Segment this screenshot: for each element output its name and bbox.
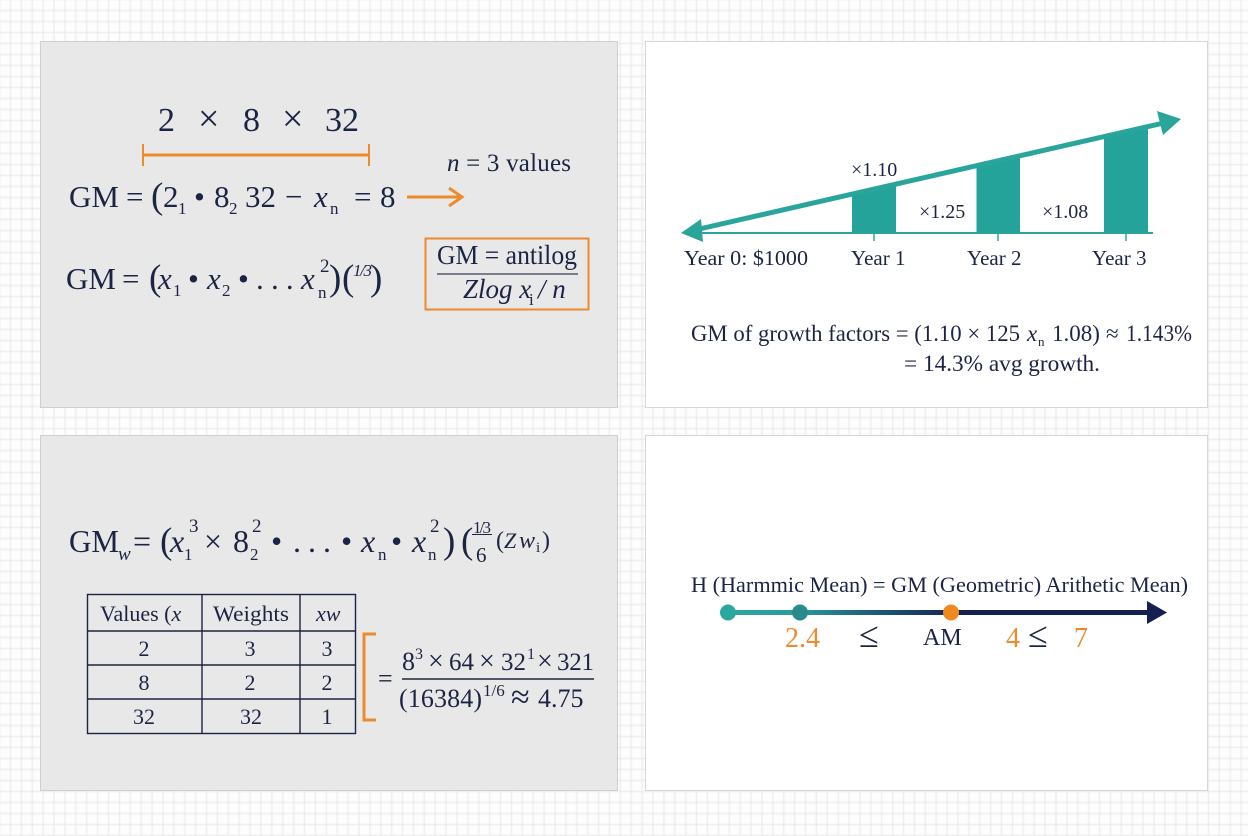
weighted calculation result: 1/6	[483, 681, 505, 700]
table rows: 3	[244, 636, 256, 661]
formula: weighted GM: (	[160, 521, 172, 562]
formula: weighted GM: 2	[252, 516, 262, 537]
growth multipliers	[851, 159, 1088, 223]
year axis labels: Year 3	[1092, 246, 1146, 270]
weighted calculation result: ≈	[511, 679, 530, 716]
formula: weighted GM: •	[271, 523, 282, 559]
panel: growth rates	[646, 42, 1208, 408]
formula: weighted GM: GM	[69, 523, 119, 559]
formula: weighted GM: ×	[204, 523, 222, 559]
table header: xw	[315, 601, 341, 626]
growth multipliers: ×1.25	[919, 201, 965, 223]
table rows	[133, 636, 332, 729]
table rows: 2	[138, 636, 150, 661]
table rows: 2	[244, 670, 256, 695]
table rows: 32	[240, 704, 262, 729]
formula: weighted GM: )	[542, 528, 550, 554]
number line labels: 4	[1006, 623, 1020, 654]
formula: general GM: )	[329, 258, 341, 299]
formula: weighted GM: 3	[189, 516, 198, 537]
formula: general GM	[66, 256, 382, 302]
panel: weighted geometric mean	[40, 436, 618, 790]
formula: worked GM: =	[126, 179, 143, 214]
number line labels: ≤	[1028, 615, 1048, 655]
formula: worked GM: n	[330, 199, 339, 218]
table: values and weights	[87, 594, 356, 734]
formula: general GM: •	[188, 261, 199, 296]
formula: worked GM: 8	[380, 179, 396, 214]
formula: general GM: x	[206, 261, 221, 296]
table header: Weights	[213, 601, 289, 626]
marker: arithmetic mean	[943, 604, 959, 620]
formula: weighted GM: x	[169, 523, 184, 559]
callout: antilog formula box: GM = antilog	[437, 240, 577, 270]
growth result text: n	[1038, 334, 1045, 349]
growth result text: 1.143%	[1126, 321, 1192, 346]
weighted calculation result: 4.75	[538, 684, 584, 713]
product of values: ×	[282, 98, 303, 140]
formula: worked GM: x	[313, 179, 328, 214]
callout: antilog formula box: Zlog x	[463, 274, 531, 304]
formula: general GM: •	[238, 261, 249, 296]
formula: weighted GM: w	[118, 544, 131, 565]
formula: general GM: (	[149, 258, 161, 299]
formula: weighted GM	[69, 516, 550, 567]
chart: growth bars with trend arrow	[681, 111, 1181, 242]
orange bracket	[364, 634, 376, 720]
marker: harmonic mean	[720, 604, 736, 620]
number line labels: 2.4	[785, 623, 820, 654]
formula: weighted GM: (	[496, 528, 504, 554]
growth multipliers: ×1.10	[851, 159, 897, 181]
formula: weighted GM: x	[360, 523, 375, 559]
growth result text: = 14.3% avg growth.	[904, 351, 1100, 376]
formula: weighted GM: •	[341, 523, 352, 559]
product of values: ×	[198, 98, 219, 140]
marker: geometric mean	[792, 604, 808, 620]
formula: weighted GM: n	[428, 545, 437, 564]
formula: weighted GM: =	[133, 523, 151, 559]
formula: general GM: )	[370, 258, 382, 299]
formula: worked GM: −	[285, 179, 302, 214]
growth multipliers: ×1.08	[1042, 201, 1088, 223]
formula: worked GM: 2	[163, 179, 178, 214]
formula: general GM: n	[318, 283, 327, 302]
weighted calculation result: ×	[428, 646, 444, 677]
formula: weighted GM: 6	[476, 543, 486, 567]
table header: Values (x	[100, 601, 181, 626]
inequality heading: H (Harmmic Mean) = GM (Geometric) Arithetic Mean)	[691, 572, 1188, 597]
formula: weighted GM: x	[411, 523, 426, 559]
formula: worked GM: 2	[229, 199, 238, 218]
number line labels: AM	[923, 625, 962, 651]
product of values	[158, 98, 359, 140]
formula: weighted GM: •	[391, 523, 402, 559]
orange arrow to result	[407, 188, 462, 206]
formula: general GM: 1/3	[353, 261, 372, 280]
number line labels: 7	[1074, 623, 1088, 654]
formula: worked GM: GM	[69, 179, 119, 214]
product of values: 32	[325, 102, 359, 139]
table header	[100, 601, 341, 626]
year axis labels	[684, 246, 1146, 270]
formula: worked GM	[69, 176, 396, 218]
weighted calculation result: 64	[449, 649, 474, 676]
formula: worked GM: 1	[178, 199, 186, 218]
formula: general GM: 2	[222, 281, 230, 300]
formula: worked GM: =	[354, 179, 371, 214]
table rows: 1	[322, 704, 332, 729]
year axis labels: Year 1	[851, 246, 905, 270]
panel: mean inequality	[646, 436, 1208, 790]
formula: worked GM: 8	[214, 179, 230, 214]
formula: worked GM: •	[194, 179, 205, 214]
weighted calculation result	[378, 646, 594, 716]
weighted calculation result: 1	[527, 646, 535, 663]
formula: general GM: =	[122, 261, 139, 296]
formula: worked GM: 32	[245, 179, 276, 214]
table rows: 2	[322, 670, 332, 695]
weighted calculation result: 32	[501, 649, 526, 676]
number line labels	[785, 615, 1088, 655]
product of values: 8	[243, 102, 260, 139]
number line labels: ≤	[859, 615, 879, 655]
weighted calculation result: 8	[402, 647, 415, 676]
formula: weighted GM: w	[519, 528, 535, 554]
growth result text: ≈	[1106, 321, 1119, 346]
callout: antilog formula box: / n	[536, 274, 566, 304]
table rows: 32	[133, 704, 155, 729]
formula: weighted GM: 8	[233, 523, 249, 559]
number line arrow	[728, 601, 1167, 624]
formula: weighted GM: 1	[184, 545, 192, 564]
n equals 3 values label: n = 3 values	[447, 150, 571, 177]
weighted calculation result: 3	[415, 646, 423, 663]
weighted calculation result: ×	[537, 646, 553, 677]
growth result text: 1.08)	[1052, 321, 1100, 346]
year axis labels: Year 0: $1000	[684, 246, 808, 270]
product of values: 2	[158, 102, 175, 139]
weighted calculation result: =	[378, 664, 393, 693]
formula: weighted GM: (	[461, 521, 473, 562]
formula: weighted GM: i	[536, 540, 540, 556]
panel: basic geometric mean	[40, 42, 618, 408]
table rows: 3	[322, 636, 332, 661]
formula: general GM: GM	[66, 261, 116, 296]
weighted calculation result: (16384)	[399, 684, 482, 713]
formula: general GM: ...	[256, 261, 301, 296]
growth result text: x	[1026, 321, 1038, 346]
formula: weighted GM: 2	[430, 516, 440, 537]
weighted calculation result: ×	[479, 646, 495, 677]
formula: weighted GM: n	[378, 545, 387, 564]
formula: weighted GM: )	[443, 521, 455, 562]
year axis labels: Year 2	[967, 246, 1021, 270]
formula: general GM: (	[342, 258, 354, 299]
growth result text	[691, 321, 1192, 376]
callout: antilog formula box	[426, 238, 588, 310]
weighted calculation result: 321	[557, 649, 594, 676]
orange span bracket	[143, 144, 369, 166]
formula: weighted GM: Z	[504, 528, 517, 553]
formula: weighted GM: 2	[250, 545, 258, 564]
callout: antilog formula box: i	[529, 290, 534, 309]
formula: general GM: 1	[173, 281, 182, 300]
formula: weighted GM: ...	[293, 523, 338, 559]
table rows: 8	[138, 670, 150, 695]
formula: general GM: 2	[320, 256, 330, 277]
formula: weighted GM: 1/3	[473, 518, 491, 537]
growth result text: GM of growth factors = (1.10 × 125	[691, 321, 1020, 346]
formula: general GM: x	[300, 261, 315, 296]
formula: general GM: x	[157, 261, 172, 296]
formula: worked GM: (	[151, 176, 163, 217]
